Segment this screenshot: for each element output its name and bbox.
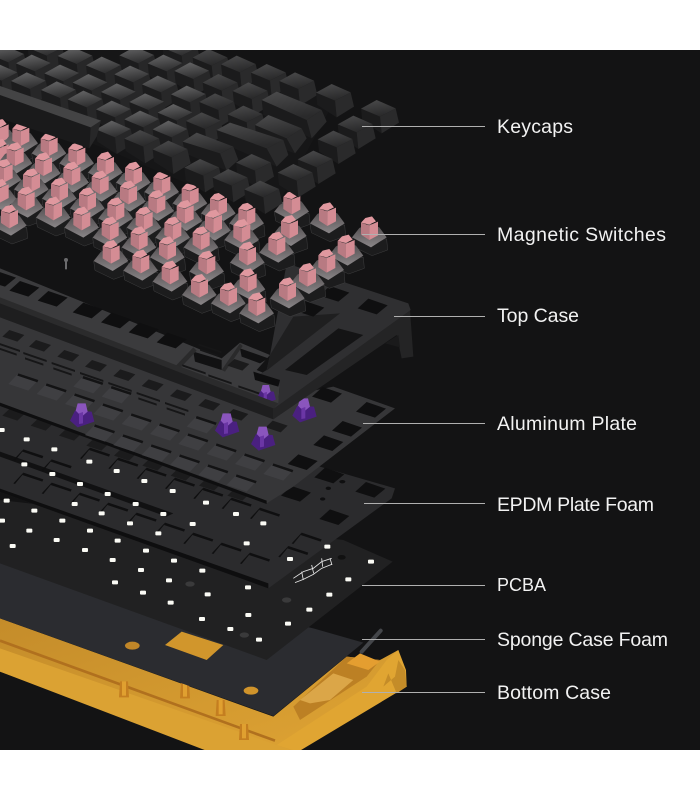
label: Magnetic Switches: Magnetic Switches <box>497 224 666 246</box>
LED dots <box>0 428 374 642</box>
layer: sponge case foam <box>0 553 381 716</box>
layer: bottom case <box>0 618 407 753</box>
label: Keycaps: Keycaps <box>497 116 573 138</box>
key: wide keys <box>255 92 327 153</box>
layer: PCBA <box>0 500 393 660</box>
icon: screw <box>64 258 68 269</box>
key: space bar <box>0 86 101 148</box>
icon: solder detail <box>293 558 332 583</box>
layer: keycaps <box>0 39 399 214</box>
layer: magnetic switches <box>0 119 388 332</box>
layer: top case <box>0 263 413 419</box>
label: Bottom Case: Bottom Case <box>497 682 611 704</box>
label: Aluminum Plate: Aluminum Plate <box>497 413 637 435</box>
label: EPDM Plate Foam: EPDM Plate Foam <box>497 494 654 516</box>
layer: aluminum plate <box>0 307 395 504</box>
label: Sponge Case Foam: Sponge Case Foam <box>497 629 668 651</box>
icon: purple stabilizers <box>70 398 317 451</box>
key: enter and shift <box>183 123 288 171</box>
exploded keyboard layers <box>0 39 413 753</box>
label: Top Case: Top Case <box>497 305 579 327</box>
layer: EPDM plate foam <box>0 400 395 588</box>
label: PCBA: PCBA <box>497 575 546 595</box>
